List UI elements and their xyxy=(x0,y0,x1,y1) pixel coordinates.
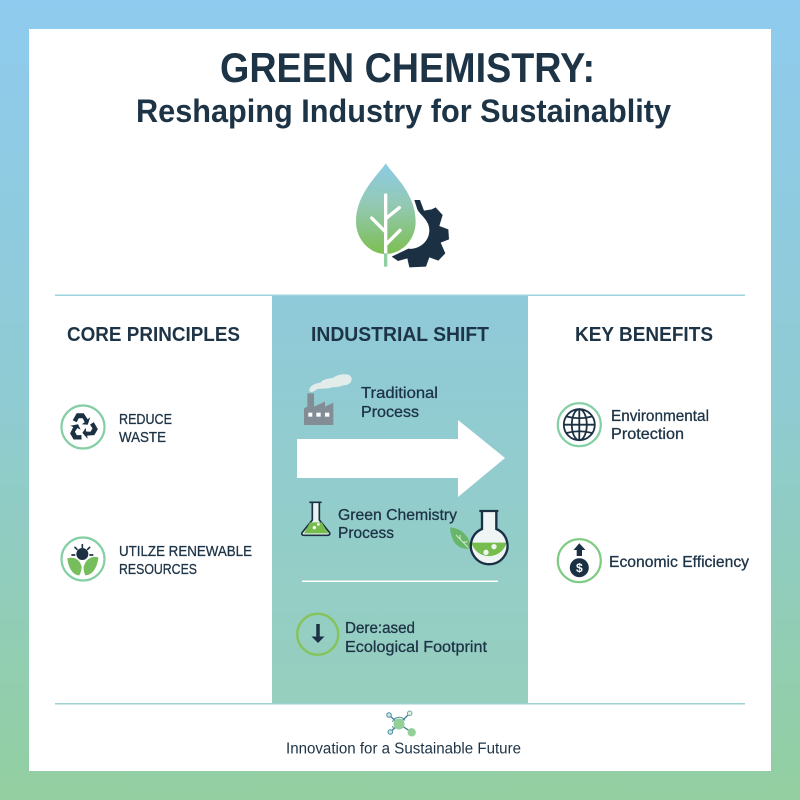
icon: recycle xyxy=(62,406,104,448)
label: green chemistry process: Process xyxy=(338,525,394,542)
panel: industrial shift background xyxy=(272,296,528,703)
label: environmental protection xyxy=(611,408,709,443)
label: reduce waste: REDUCE xyxy=(119,411,172,428)
icon: leaf and gear xyxy=(356,163,449,267)
panel: key benefits xyxy=(558,324,749,582)
heading: key benefits: KEY BENEFITS xyxy=(575,324,713,346)
title: GREEN CHEMISTRY: xyxy=(220,44,595,91)
label: environmental protection: Environmental xyxy=(611,408,709,425)
label: traditional process xyxy=(361,385,438,421)
label: utilize renewable resources xyxy=(119,543,252,578)
panel: core principles xyxy=(62,324,252,580)
icon: round flask with leaf xyxy=(450,511,507,565)
label: green chemistry process: Green Chemistry xyxy=(338,507,457,524)
icon: molecule network xyxy=(387,711,416,736)
title: Reshaping Industry for Sustainablity xyxy=(136,93,671,129)
label: economic efficiency: Economic Efficiency xyxy=(609,554,749,571)
label: decreased ecological footprint: Ecological Footprint xyxy=(345,639,488,656)
bottom divider xyxy=(55,703,745,704)
label: decreased ecological footprint: Dere:ased xyxy=(345,620,415,637)
icon: small flask xyxy=(302,502,330,535)
icon: factory xyxy=(304,374,352,425)
icon: dollar with up arrow xyxy=(558,539,601,582)
icon: renewable sun and leaves xyxy=(62,538,104,580)
label: green chemistry process xyxy=(338,507,457,542)
icon: down arrow xyxy=(297,614,338,655)
icon: globe xyxy=(558,403,601,446)
divider: white line xyxy=(302,580,498,582)
label: traditional process: Traditional xyxy=(361,385,438,402)
label: decreased ecological footprint xyxy=(345,620,488,656)
top divider xyxy=(55,294,745,296)
label: reduce waste xyxy=(119,411,172,446)
label: utilize renewable resources: RESOURCES xyxy=(119,561,197,578)
footer xyxy=(286,711,521,758)
heading: core principles: CORE PRINCIPLES xyxy=(67,324,240,346)
heading: industrial shift: INDUSTRIAL SHIFT xyxy=(311,324,489,346)
label: reduce waste: WASTE xyxy=(119,429,166,446)
label: traditional process: Process xyxy=(361,404,419,421)
icon: dollar with up arrow: $ xyxy=(576,561,583,575)
arrow xyxy=(297,420,505,497)
panel: industrial shift xyxy=(297,324,507,656)
title xyxy=(136,44,671,129)
label: utilize renewable resources: UTILZE RENEWABLE xyxy=(119,543,252,560)
footer text: Innovation for a Sustainable Future xyxy=(286,740,521,758)
label: environmental protection: Protection xyxy=(611,426,684,443)
